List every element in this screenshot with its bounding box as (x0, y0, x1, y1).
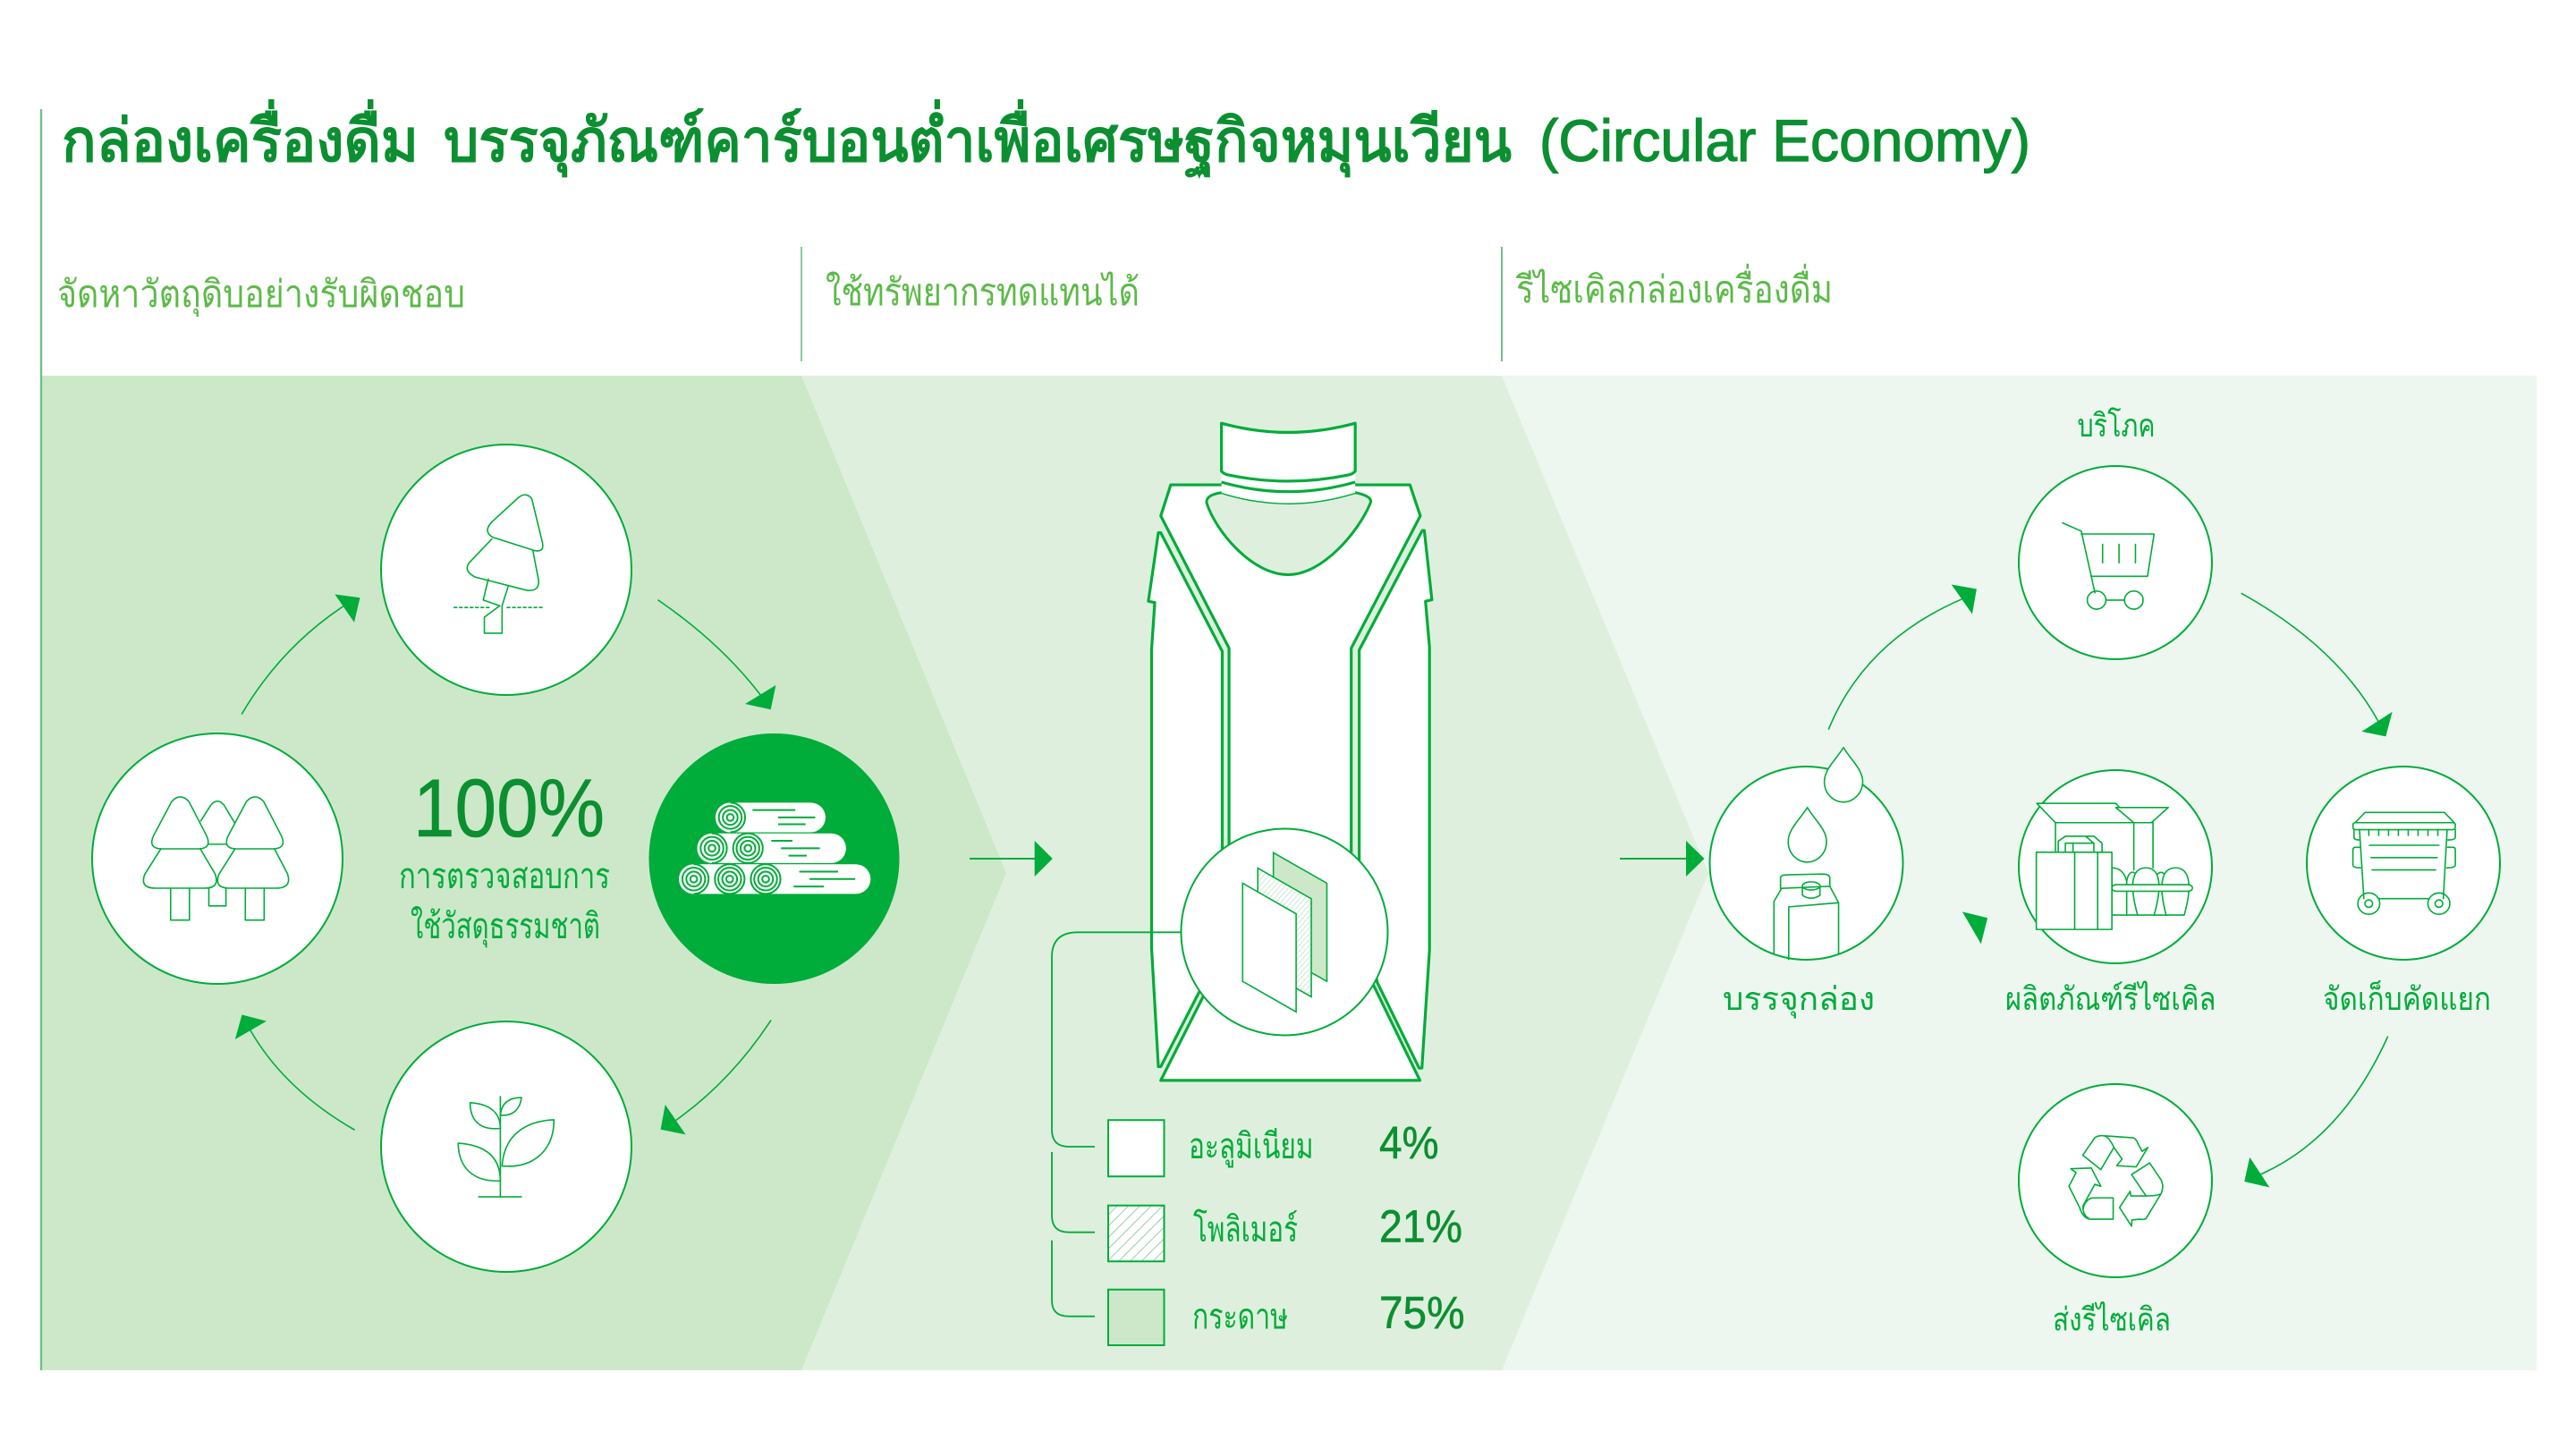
legend: polymer (1108, 1201, 1462, 1261)
title: บรรจุภัณฑ์คาร์บอนต่ำเพื่อเศรษฐกิจหมุนเวียน (444, 98, 1512, 179)
legend: paper: กระดาษ (1192, 1298, 1288, 1337)
label: collect and sort: จัดเก็บคัดแยก (2323, 979, 2491, 1017)
arrow: packaging to consume (1829, 584, 1977, 729)
text: natural material audit line 1: การตรวจสอบการ (399, 857, 610, 896)
label: packaging: บรรจุกล่อง (1723, 980, 1875, 1019)
title: กล่องเครื่องดื่ม (62, 98, 419, 174)
arrow: products to packaging (1962, 911, 1987, 944)
icon: layered sheets (1242, 852, 1326, 1012)
circle: consume (2019, 466, 2212, 659)
legend: polymer: โพลิเมอร์ (1193, 1209, 1298, 1250)
arrow: harvest to logs (658, 600, 775, 709)
carton: centre panel (1161, 485, 1420, 1080)
panel: responsible sourcing background (41, 376, 1006, 1370)
illustration: beverage carton (1148, 423, 1432, 1080)
circle: seedling (381, 1021, 631, 1272)
stat: 100%: 100% (413, 763, 605, 854)
arrow: into carton (970, 841, 1053, 877)
circle: logs (649, 733, 900, 984)
arrow: collect to send (2244, 1037, 2387, 1188)
title: (Circular Economy) (1539, 107, 2030, 174)
legend: aluminium: อะลูมิเนียม (1189, 1127, 1313, 1167)
circle: harvested tree (381, 445, 631, 695)
arrow: logs to seedling (661, 1021, 771, 1134)
arrow: into recycling (1620, 841, 1705, 877)
icon: three trees (143, 797, 289, 920)
legend: polymer: 21% (1379, 1201, 1462, 1252)
circle: packaging (1710, 748, 1903, 960)
legend: paper: 75% (1379, 1287, 1465, 1338)
heading: responsible sourcing: จัดหาวัตถุดิบอย่างรับผิดชอบ (57, 273, 465, 318)
carton: neck opening (1207, 493, 1371, 575)
icon: factory, bag and bottles (2037, 803, 2192, 929)
legend: aluminium: 4% (1379, 1117, 1438, 1168)
legend: aluminium (1108, 1117, 1438, 1176)
legend: paper (1108, 1287, 1465, 1345)
connector lines to legend (1052, 932, 1181, 1317)
icon: drops and carton (1774, 748, 1862, 960)
label: send to recycle: ส่งรีไซเคิล (2053, 1301, 2171, 1338)
carton: left side panel (1148, 533, 1223, 1067)
heading: recycle cartons: รีไซเคิลกล่องเครื่องดื่ม (1515, 264, 1833, 310)
panel: renewable resources background (801, 376, 1708, 1370)
circle: sort and collect (2307, 767, 2500, 960)
callout: material layers (1181, 828, 1388, 1036)
circle: send to recycle (2019, 1084, 2212, 1277)
icon: cut tree (454, 495, 543, 633)
arrow: consume to collect (2241, 594, 2393, 736)
icon: recycling symbol (2069, 1136, 2163, 1226)
carton: right side panel (1360, 530, 1432, 1068)
carton: collar (1222, 469, 1355, 503)
text: natural material audit line 2: ใช้วัสดุธรรมชาติ (411, 905, 600, 948)
label: consume: บริโภค (2077, 407, 2156, 444)
label: recycled products: ผลิตภัณฑ์รีไซเคิล (2005, 980, 2216, 1017)
icon: wheeled bin (2353, 812, 2455, 914)
circle: recycled products (2019, 770, 2212, 963)
panel: recycling background (1502, 376, 2537, 1370)
title (62, 98, 2030, 179)
carton: cap (1222, 423, 1355, 481)
circle: forest (92, 733, 343, 984)
arrow: seedling to forest (235, 1014, 354, 1130)
icon: log pile (679, 802, 870, 894)
arrow: forest to harvest (242, 594, 360, 714)
cycle: sourcing (92, 445, 900, 1272)
icon: plant (458, 1097, 554, 1197)
icon: shopping cart (2063, 523, 2154, 609)
heading: renewable resources: ใช้ทรัพยากรทดแทนได้ (826, 271, 1140, 313)
